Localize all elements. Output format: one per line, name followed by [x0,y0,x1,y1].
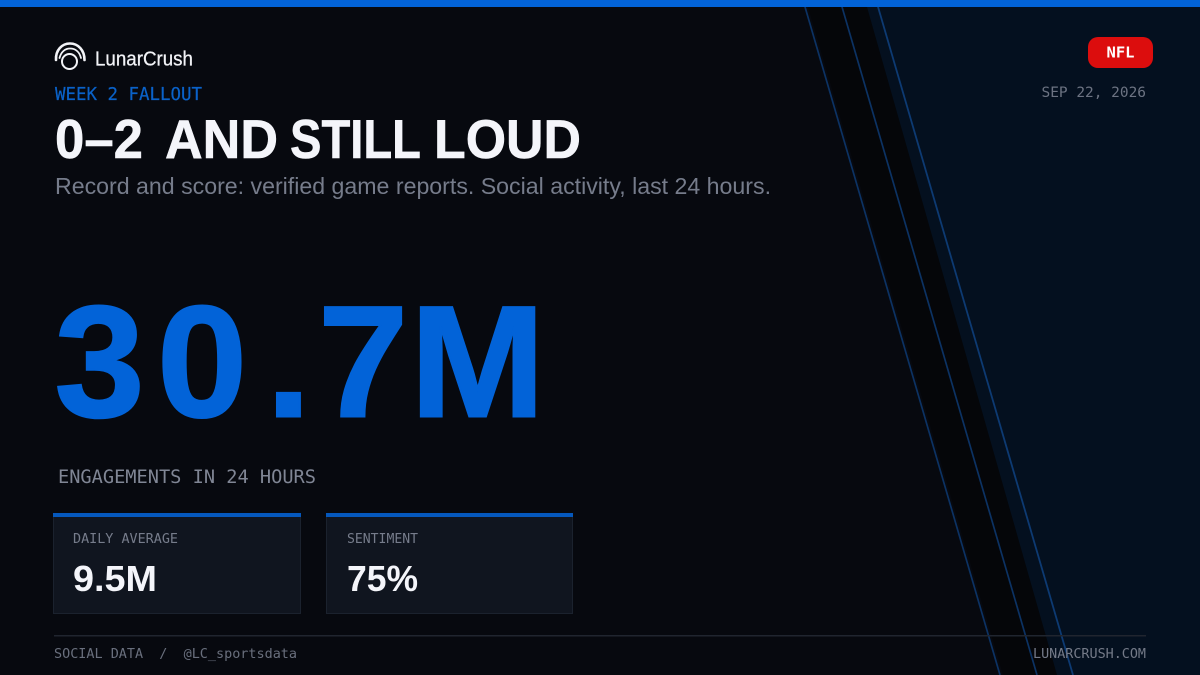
icon: moon arcs [56,44,84,69]
card value: 75% [347,558,418,599]
date: SEP 22, 2026 [1042,85,1146,101]
title: 0–2 [55,108,143,170]
title: LOUD [434,108,581,170]
footer site: LUNARCRUSH.COM [1033,647,1146,662]
NFL badge [1088,37,1153,68]
footer source: SOCIAL DATA / @LC_sportsdata [54,647,297,662]
title: STILL [290,108,421,170]
card value: 9.5M [73,558,157,599]
card: sentiment [326,513,573,614]
card label: SENTIMENT [347,532,418,547]
eyebrow: WEEK 2 FALLOUT [55,85,203,105]
card: daily average [53,513,301,614]
logo wordmark: LunarCrush [95,48,193,70]
card label: DAILY AVERAGE [73,532,178,547]
top accent bar [0,0,1200,7]
title: AND [165,108,278,170]
big metric: 30.7M [54,274,545,451]
NFL badge: NFL [1106,44,1134,62]
subtitle: Record and score: verified game reports. Social activity, last 24 hours. [55,173,771,199]
metric label: ENGAGEMENTS IN 24 HOURS [58,467,316,488]
logo: LunarCrush [56,44,193,70]
